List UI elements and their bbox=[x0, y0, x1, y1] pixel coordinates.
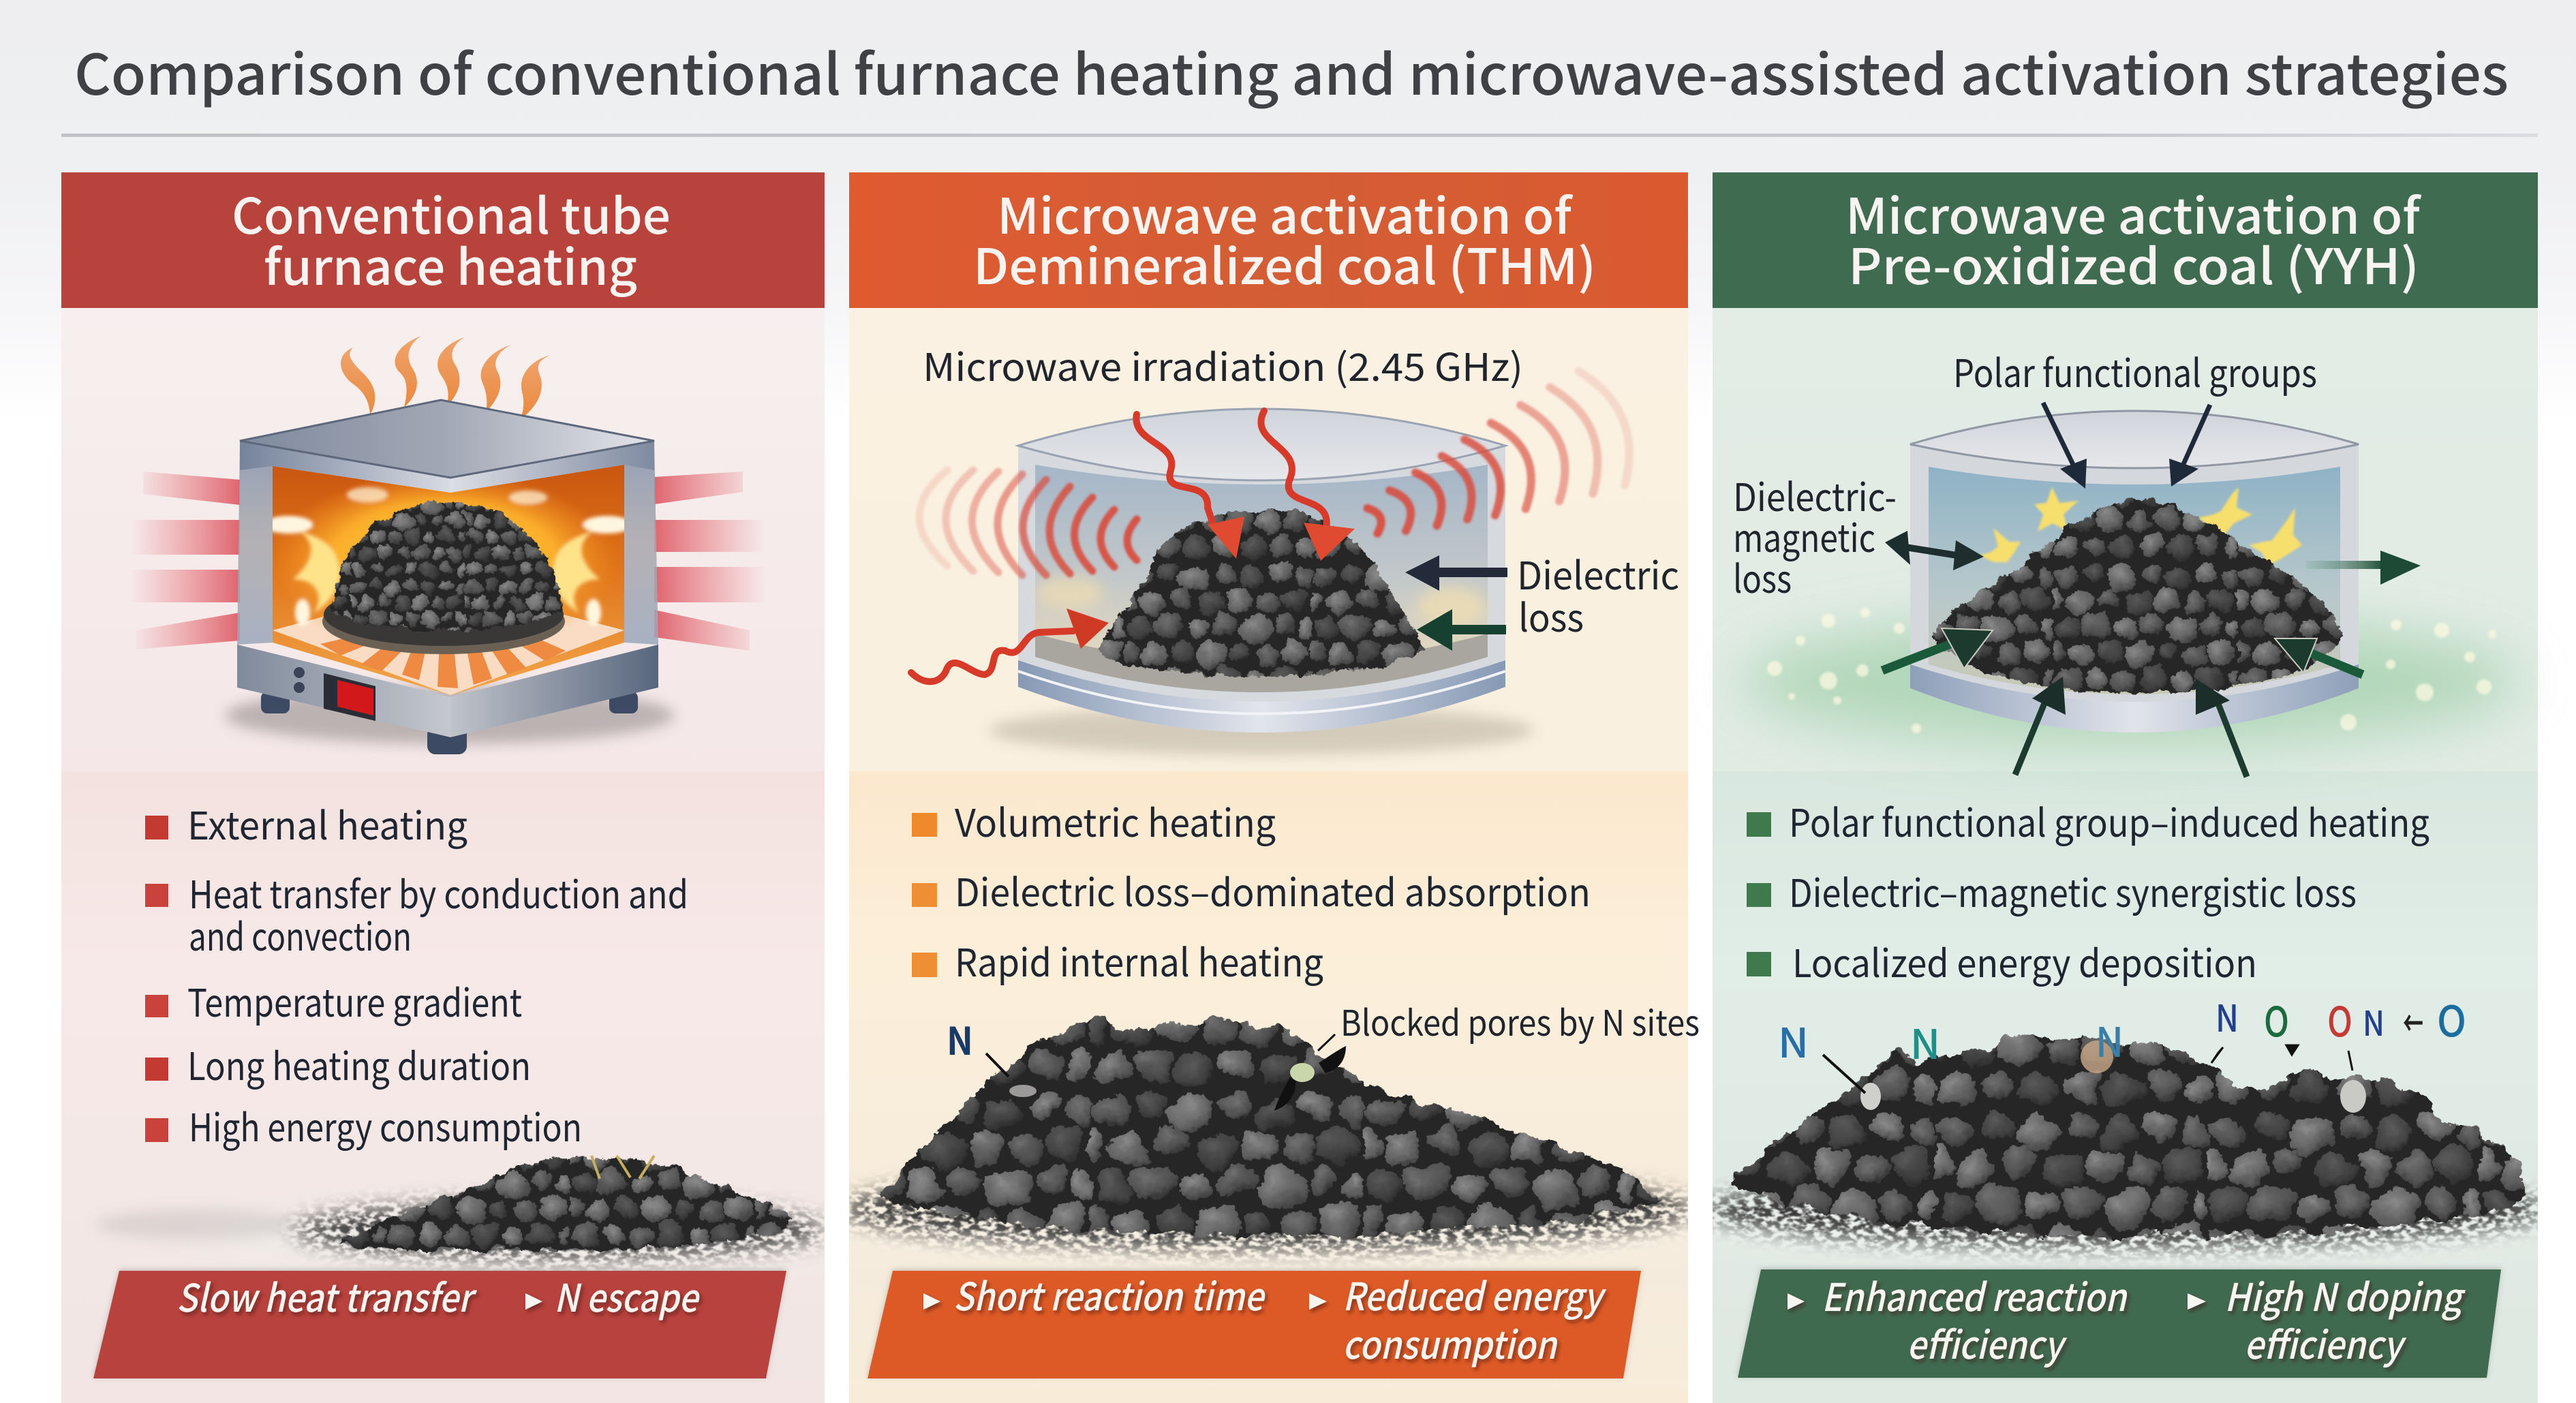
furnace base and control panel bbox=[237, 645, 658, 737]
bottom banner: efficiency bbox=[2244, 1315, 2407, 1370]
icon: sparks bbox=[1980, 487, 2302, 566]
panel: conventional tube furnace heating bbox=[61, 172, 845, 1403]
bottom banner bbox=[93, 1268, 786, 1378]
feature list: High energy consumption bbox=[189, 1098, 582, 1153]
labels: N and O atoms: N bbox=[1910, 1012, 1940, 1071]
bottom banner: Short reaction time bbox=[953, 1267, 1266, 1322]
bottom banner: Slow heat transfer bbox=[177, 1268, 477, 1323]
arrow: polar groups, left bbox=[2043, 403, 2087, 489]
header: YYH: Microwave activation of bbox=[1845, 176, 2422, 248]
coal pile with N and O doping bbox=[1704, 1032, 2549, 1261]
label: microwave irradiation: Microwave irradiation (2.45 GHz) bbox=[923, 337, 1523, 392]
icon: right microwave arcs bbox=[1349, 363, 1646, 578]
arrow: dielectric loss, navy bbox=[1405, 555, 1507, 591]
labels: N and O atoms: O bbox=[2327, 989, 2352, 1049]
label: N site: N bbox=[947, 1011, 973, 1066]
icon: rising heat waves bbox=[341, 336, 551, 420]
labels: N and O atoms: O bbox=[2437, 987, 2466, 1049]
bottom banner: High N doping bbox=[2224, 1267, 2466, 1323]
coal pile in vessel bbox=[1097, 510, 1424, 676]
arrow: energy out, right bbox=[2306, 551, 2421, 585]
bottom banner: Reduced energy bbox=[1343, 1267, 1607, 1322]
header: THM: Demineralized coal (THM) bbox=[973, 227, 1596, 298]
label: dielectric-magnetic loss bbox=[1733, 467, 1897, 604]
bottom banner bbox=[1738, 1267, 2501, 1378]
label: polar functional groups: Polar functional groups bbox=[1953, 343, 2317, 399]
feature list: Localized energy deposition bbox=[1792, 934, 2257, 989]
labels: N and O atoms: O bbox=[2264, 989, 2289, 1049]
panel: microwave activation of demineralized coal (THM) bbox=[831, 172, 1704, 1403]
vessel glass body bbox=[1910, 411, 2359, 733]
coal pile with blocked pores bbox=[831, 1019, 1704, 1261]
icon: left microwave arcs bbox=[919, 470, 1137, 575]
label: dielectric-magnetic loss: loss bbox=[1733, 549, 1792, 604]
label: dielectric loss bbox=[1517, 546, 1679, 643]
arrow: bottom left bbox=[2015, 677, 2066, 775]
header: conventional tube furnace heating: furnace heating bbox=[264, 228, 637, 299]
feature list: External heating bbox=[187, 796, 467, 851]
feature list: Temperature gradient bbox=[187, 973, 522, 1028]
title: Comparison of conventional furnace heating and microwave-assisted activation strategies bbox=[74, 30, 2509, 111]
arrow: microwave in, lower wavy bbox=[911, 608, 1109, 681]
feature list: Long heating duration bbox=[187, 1036, 531, 1092]
feature list: Polar functional group–induced heating bbox=[1789, 793, 2429, 848]
feature list: Dielectric–magnetic synergistic loss bbox=[1789, 863, 2357, 919]
furnace feet bbox=[261, 692, 638, 754]
header: THM: Microwave activation of bbox=[997, 176, 1574, 248]
green glow with bubbles bbox=[1741, 608, 2518, 746]
label: N site bbox=[947, 1011, 1009, 1077]
feature list: Heat transfer by conduction and bbox=[189, 865, 688, 920]
arrow: lower right bbox=[2275, 638, 2363, 675]
arrow: bottom right bbox=[2196, 679, 2247, 777]
feature list: and convection bbox=[189, 907, 412, 962]
arrow: microwave in, right wavy bbox=[1261, 411, 1355, 561]
feature list: Dielectric loss–dominated absorption bbox=[955, 863, 1591, 918]
arrow: dielectric loss, green bbox=[1417, 609, 1506, 651]
pan bbox=[322, 583, 565, 654]
labels: N and O atoms: N bbox=[2096, 1010, 2123, 1069]
illustration: microwave vessel bbox=[911, 363, 1679, 755]
feature list: Rapid internal heating bbox=[955, 933, 1323, 988]
arrow: microwave in, left wavy bbox=[1136, 414, 1244, 559]
bottom banner: N escape bbox=[554, 1268, 701, 1323]
furnace interior walls bbox=[273, 465, 624, 695]
labels: N and O atoms: ← bbox=[2403, 997, 2423, 1046]
coal pile in vessel bbox=[1932, 499, 2341, 692]
label: blocked pores: Blocked pores by N sites bbox=[1340, 995, 1700, 1046]
arrow: dielectric-magnetic double bbox=[1885, 531, 1984, 570]
icon: radiating heat bands bbox=[129, 472, 767, 651]
heated floor stripes bbox=[273, 606, 624, 695]
label: dielectric-magnetic loss: Dielectric- bbox=[1733, 467, 1897, 523]
header: conventional tube furnace heating: Conventional tube bbox=[232, 176, 671, 248]
labels: N and O atoms bbox=[1778, 987, 2466, 1093]
header: THM bbox=[849, 172, 1688, 308]
header: conventional tube furnace heating bbox=[61, 172, 825, 308]
feature list: Volumetric heating bbox=[955, 793, 1276, 848]
flames bbox=[264, 470, 632, 654]
coal pile with escaping nitrogen bbox=[95, 1156, 845, 1271]
panel: microwave activation of pre-oxidized coal (YYH) bbox=[1704, 172, 2549, 1403]
bottom banner: Enhanced reaction bbox=[1822, 1267, 2128, 1323]
coal dome bbox=[331, 502, 562, 630]
header: YYH bbox=[1713, 172, 2538, 308]
illustration: tube furnace bbox=[129, 336, 767, 754]
label: dielectric-magnetic loss: magnetic bbox=[1733, 508, 1875, 564]
labels: N and O atoms: N bbox=[2363, 997, 2385, 1046]
labels: N and O atoms: N bbox=[2215, 989, 2239, 1043]
vessel glass body bbox=[1018, 409, 1505, 733]
illustration: microwave vessel with synergistic loss bbox=[1733, 403, 2518, 777]
feature list bbox=[1747, 793, 2429, 989]
labels: N and O atoms: N bbox=[1778, 1011, 1809, 1070]
feature list bbox=[912, 793, 1591, 988]
furnace frame bbox=[237, 400, 658, 645]
bottom banner: efficiency bbox=[1907, 1315, 2068, 1370]
arrow: lower left bbox=[1882, 628, 1993, 670]
label: dielectric loss: Dielectric bbox=[1517, 546, 1679, 601]
header: YYH: Pre-oxidized coal (YYH) bbox=[1848, 227, 2419, 298]
arrow: polar groups, right bbox=[2169, 405, 2210, 487]
bottom banner: consumption bbox=[1343, 1315, 1559, 1370]
label: dielectric loss: loss bbox=[1518, 588, 1584, 643]
feature list bbox=[145, 796, 688, 1153]
bottom banner bbox=[868, 1267, 1641, 1378]
